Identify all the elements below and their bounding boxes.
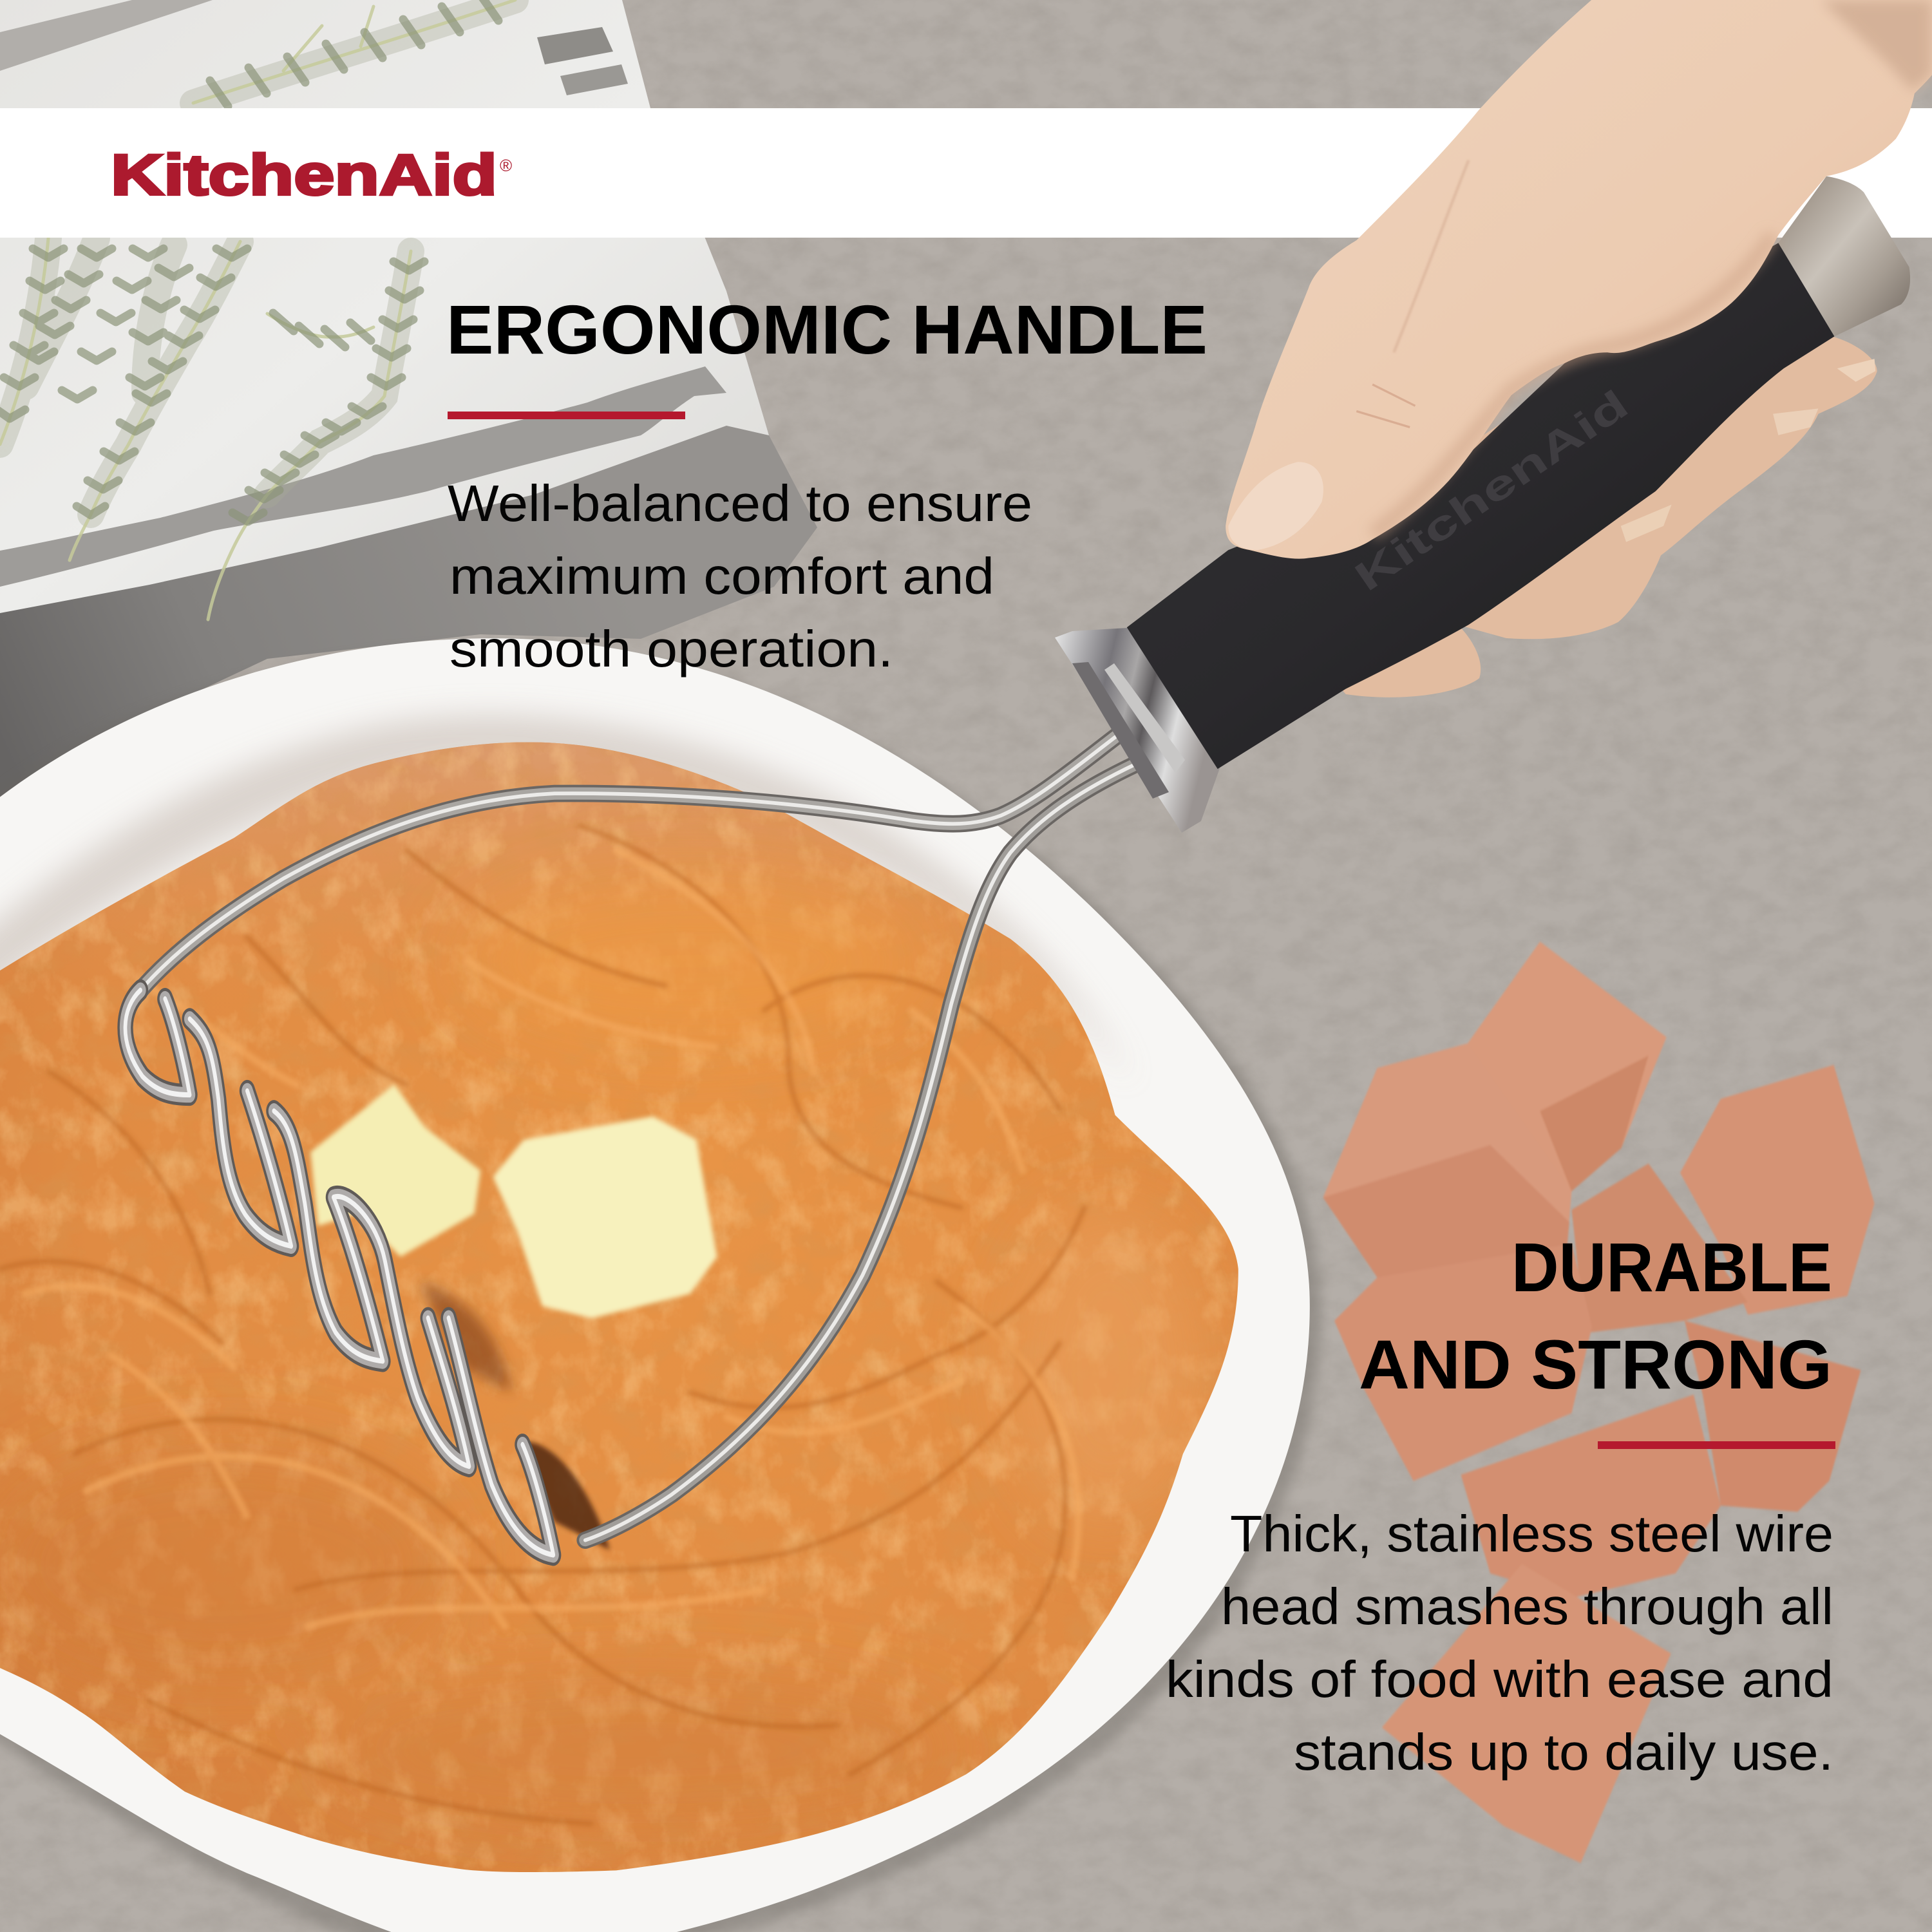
wrist shading bbox=[1821, 0, 1932, 91]
potato masher wire bbox=[138, 734, 1136, 1540]
body text: durable: stands up to daily use. bbox=[1294, 1723, 1833, 1781]
logo: KitchenAid: ® bbox=[500, 156, 512, 175]
cube middle bbox=[1571, 1164, 1748, 1333]
lower fingers bbox=[1255, 336, 1877, 697]
sweet potato cubes bbox=[1323, 942, 1875, 1863]
handle logo emboss: KitchenAid bbox=[1347, 381, 1636, 600]
body text: ergonomic: Well-balanced to ensure bbox=[448, 475, 1032, 532]
cube top bbox=[1468, 942, 1667, 1222]
photo: towel and herbs bbox=[0, 0, 817, 831]
top wire bbox=[138, 734, 1119, 993]
red rule: ergonomic bbox=[448, 412, 685, 419]
silver end cap bbox=[1778, 176, 1910, 336]
upper hand bbox=[1226, 0, 1932, 559]
body text: ergonomic bbox=[448, 475, 1032, 677]
herb stems bbox=[0, 0, 515, 620]
mash tonal patches bbox=[0, 875, 1208, 1824]
red rule: durable bbox=[1598, 1441, 1835, 1449]
thumbnail bbox=[1228, 462, 1323, 550]
body text: durable: Thick, stainless steel wire bbox=[1230, 1505, 1833, 1562]
body text: durable bbox=[1166, 1505, 1833, 1781]
body text: durable: kinds of food with ease and bbox=[1166, 1651, 1833, 1708]
chrome collar bbox=[1055, 628, 1220, 833]
cube lower right bbox=[1685, 1321, 1861, 1511]
heading: ergonomic handle: ERGONOMIC HANDLE bbox=[446, 290, 1208, 368]
right wire bbox=[585, 764, 1136, 1540]
mashed sweet potato bbox=[0, 727, 1257, 1885]
bowl bbox=[0, 638, 1310, 1932]
logo: KitchenAid: KitchenAid bbox=[111, 142, 497, 207]
body text: ergonomic: maximum comfort and bbox=[450, 547, 994, 605]
dark pressed hollows bbox=[419, 1282, 511, 1392]
black handle bbox=[1127, 243, 1834, 769]
heading: durable and strong bbox=[1359, 1228, 1832, 1403]
cube lower left bbox=[1334, 1244, 1592, 1481]
herb foliage haze bbox=[0, 0, 515, 515]
bowl shadow bbox=[0, 647, 1321, 1932]
white logo band bbox=[0, 108, 1932, 238]
heading: durable and strong: AND STRONG bbox=[1359, 1325, 1832, 1403]
hand and handle bbox=[1127, 0, 1932, 769]
body text: ergonomic: smooth operation. bbox=[450, 620, 893, 677]
masher zigzag head bbox=[125, 990, 553, 1555]
herbs bbox=[0, 0, 515, 620]
bowl of mash bbox=[0, 638, 1321, 1932]
body text: durable: head smashes through all bbox=[1221, 1578, 1833, 1635]
cube lower middle bbox=[1461, 1395, 1721, 1598]
palm shadow bbox=[1372, 235, 1773, 534]
butter pats bbox=[310, 1084, 717, 1318]
herb leaves bbox=[0, 0, 498, 522]
cube right bbox=[1680, 1065, 1875, 1314]
cube left bbox=[1323, 1043, 1571, 1278]
towel bbox=[0, 0, 817, 831]
bowl inner shadow bbox=[0, 715, 1133, 1084]
heading: durable and strong: DURABLE bbox=[1511, 1228, 1832, 1306]
cube bottom bbox=[1382, 1564, 1671, 1863]
